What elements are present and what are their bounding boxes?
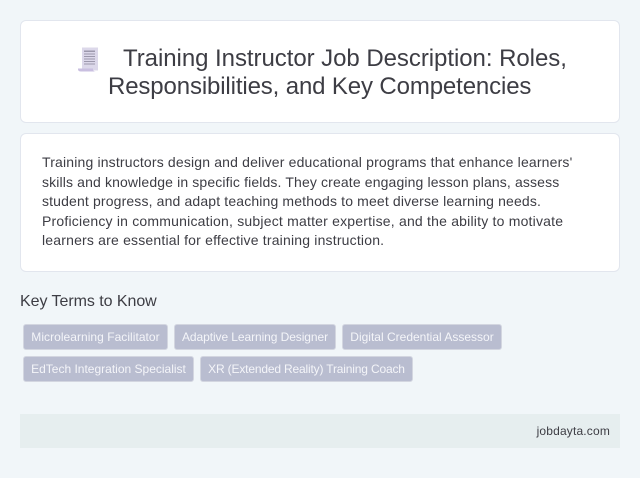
tag group: key terms bbox=[23, 324, 502, 382]
title: Training Instructor Job Description: Roles, bbox=[123, 45, 567, 72]
panel: title card bbox=[20, 20, 620, 123]
description text: Training instructors design and deliver educational programs that enhance learners' bbox=[42, 154, 572, 170]
description text: student progress, and adapt teaching methods to meet diverse learning needs. bbox=[42, 193, 541, 209]
heading: key terms: Key Terms to Know bbox=[20, 293, 157, 310]
icon: paper scroll bbox=[78, 48, 98, 72]
footer source text: jobdayta.com bbox=[537, 424, 610, 438]
footer bar bbox=[20, 414, 620, 448]
tag: adaptive learning designer bbox=[174, 324, 336, 350]
description text bbox=[42, 154, 572, 248]
title: Responsibilities, and Key Competencies bbox=[108, 73, 531, 100]
description text: Proficiency in communication, subject matter expertise, and the ability to motivate bbox=[42, 213, 563, 229]
tag: edtech integration specialist: EdTech Integration Specialist bbox=[31, 362, 186, 376]
tag: xr training coach: XR (Extended Reality) Training Coach bbox=[208, 362, 405, 376]
tag: microlearning facilitator: Microlearning Facilitator bbox=[31, 330, 160, 344]
tag: edtech integration specialist bbox=[23, 356, 194, 382]
tag: adaptive learning designer: Adaptive Learning Designer bbox=[182, 330, 328, 344]
tag: microlearning facilitator bbox=[23, 324, 168, 350]
panel: description card bbox=[20, 133, 620, 272]
tag: xr training coach bbox=[200, 356, 413, 382]
description text: learners are essential for effective training instruction. bbox=[42, 232, 384, 248]
description text: skills and knowledge in specific fields. They create engaging lesson plans, assess bbox=[42, 174, 559, 190]
tag: digital credential assessor: Digital Credential Assessor bbox=[350, 330, 494, 344]
tag: digital credential assessor bbox=[342, 324, 502, 350]
title bbox=[108, 45, 567, 100]
